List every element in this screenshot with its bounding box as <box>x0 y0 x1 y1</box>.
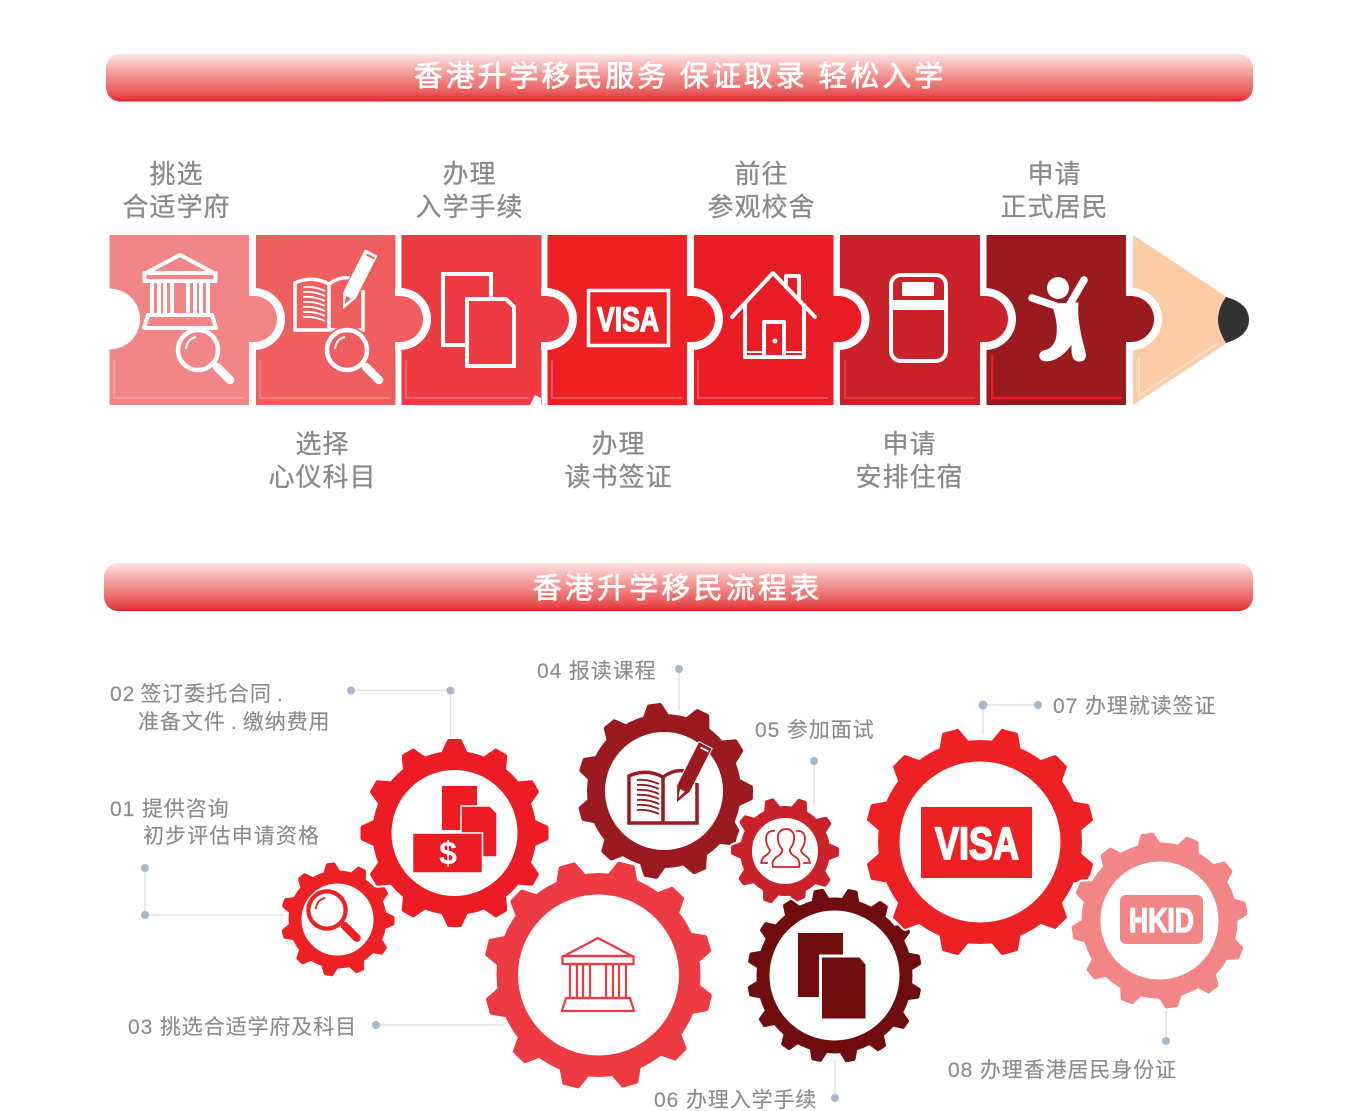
labels below the pencil <box>268 429 964 492</box>
label: 04: 04 报读课程 <box>537 660 656 683</box>
piece 7 <box>980 235 1126 405</box>
gear 7: visa <box>841 703 1119 981</box>
pencil lead <box>1218 297 1249 343</box>
label: step 7: 申请 <box>1027 159 1082 189</box>
icon: visa badge: VISA <box>935 818 1019 869</box>
banner: services heading <box>106 54 1253 102</box>
connector lines and dots <box>141 665 1170 1102</box>
label: step 2: 选择 <box>295 429 350 459</box>
icon: banknote with documents <box>412 786 497 873</box>
gear 5: bank <box>462 838 735 1111</box>
icon: hkid badge <box>1120 895 1203 944</box>
gear 4: people <box>720 786 850 916</box>
gear 2: money and documents <box>362 741 546 925</box>
icon: visa badge <box>921 807 1032 878</box>
icon: house <box>732 273 815 357</box>
gear 1: search <box>276 858 399 981</box>
piece 5 <box>687 235 834 405</box>
pencil tip <box>1126 235 1249 405</box>
label: step 5: 前往 <box>734 159 789 189</box>
label: 02: 02 签订委托合同 . <box>110 683 284 706</box>
banner: flow heading <box>104 563 1253 611</box>
label: 07: 07 办理就读签证 <box>1053 695 1216 718</box>
icon: bank <box>562 938 634 1011</box>
icon: student id card <box>889 275 947 361</box>
label: 03: 03 挑选合适学府及科目 <box>128 1016 357 1039</box>
icon: people <box>761 829 810 867</box>
pencil puzzle process bar <box>79 235 1249 405</box>
gear 3: book <box>568 695 762 887</box>
label: 08: 08 办理香港居民身份证 <box>948 1059 1177 1082</box>
label: step 6: 申请 <box>882 429 937 459</box>
icon: banknote with documents: $ <box>439 835 457 871</box>
piece 1 <box>79 235 249 405</box>
piece 6 <box>834 235 980 405</box>
gear 8: hkid <box>1062 823 1257 1018</box>
labels above the pencil <box>122 159 1109 222</box>
icon: documents <box>443 274 514 366</box>
label: step 3: 入学手续 <box>415 192 524 222</box>
label: step 5: 参观校舍 <box>707 192 816 222</box>
title: flow: 香港升学移民流程表 <box>533 572 822 605</box>
icon: documents <box>798 933 867 1020</box>
label: 02: 准备文件 . 缴纳费用 <box>138 711 330 734</box>
piece 4 <box>541 235 687 405</box>
label: 01: 初步评估申请资格 <box>143 825 320 848</box>
gear 6: documents <box>733 874 936 1077</box>
icon: book, pencil and magnifier <box>295 249 379 380</box>
icon: jumping person <box>1032 277 1085 361</box>
label: 01: 01 提供咨询 <box>110 798 230 821</box>
label: step 1: 合适学府 <box>122 192 231 222</box>
label: 05: 05 参加面试 <box>755 719 874 742</box>
label: step 4: 读书签证 <box>564 462 673 492</box>
label: step 4: 办理 <box>591 429 646 459</box>
icon: visa card: VISA <box>597 301 659 339</box>
icon: book and pencil <box>629 742 712 823</box>
label: step 7: 正式居民 <box>1000 192 1109 222</box>
title: services: 香港升学移民服务 保证取录 轻松入学 <box>414 60 946 93</box>
label: step 2: 心仪科目 <box>268 462 377 492</box>
icon: visa card <box>588 290 668 346</box>
flow step labels <box>110 660 1216 1111</box>
label: step 3: 办理 <box>442 159 497 189</box>
label: step 1: 挑选 <box>149 159 204 189</box>
icon: magnifier <box>308 891 357 938</box>
icon: hkid badge: HKID <box>1129 902 1194 940</box>
piece 3 <box>395 235 542 405</box>
label: step 6: 安排住宿 <box>855 462 964 492</box>
icon: bank and magnifier <box>144 255 230 380</box>
piece 2 <box>249 235 396 405</box>
